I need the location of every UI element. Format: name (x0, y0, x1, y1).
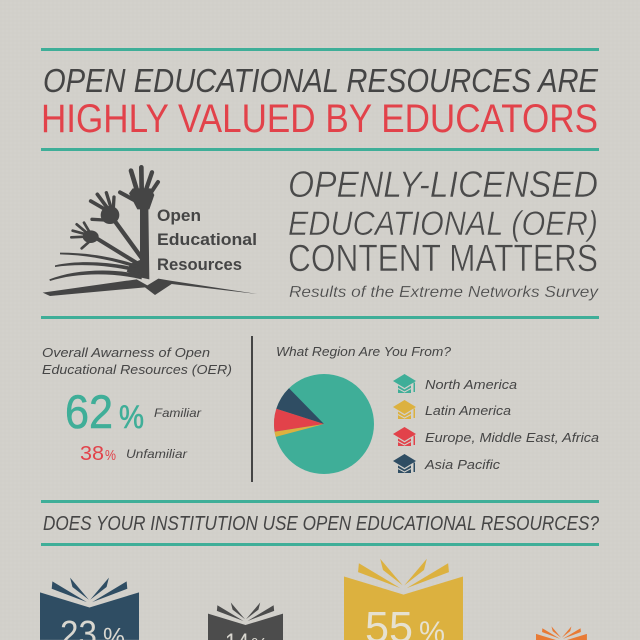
heading: openly-licensed content (288, 164, 599, 301)
logo wordmark: Resources (157, 255, 242, 274)
legend: Asia Pacific: Asia Pacific (424, 458, 501, 472)
icon: book with raised hands (43, 167, 257, 296)
heading: openly-licensed content: Results of the Extreme Networks Survey (289, 284, 599, 301)
book: 23% (40, 578, 139, 640)
awareness heading: Educational Resources (OER) (42, 362, 232, 377)
title (41, 62, 599, 141)
legend: Asia Pacific (393, 454, 501, 473)
stat: 62% familiar (65, 385, 202, 438)
stat: 38% unfamiliar (80, 443, 188, 465)
stat: 38% unfamiliar: 38 (80, 443, 104, 465)
logo wordmark: Educational (157, 230, 257, 249)
awareness heading (42, 345, 232, 377)
stat: 38% unfamiliar: % (105, 447, 116, 464)
heading: openly-licensed content: EDUCATIONAL (OER) (288, 205, 598, 243)
panel: awareness of OER (42, 345, 232, 465)
stat: 62% familiar: 62 (65, 385, 113, 438)
awareness heading: Overall Awarness of Open (42, 345, 210, 360)
legend: North America: North America (425, 378, 517, 392)
panel: region (274, 345, 599, 474)
book: 55% (344, 559, 463, 640)
pie chart (274, 374, 374, 474)
legend: Latin America: Latin America (425, 404, 511, 418)
stat: 38% unfamiliar: Unfamiliar (126, 447, 188, 461)
logo wordmark: Open (157, 206, 201, 225)
book: orange (536, 626, 587, 640)
stat: 62% familiar: Familiar (154, 406, 202, 420)
legend: Europe, Middle East, Africa: Europe, Middle East, Africa (425, 431, 599, 445)
logo: open educational resources (43, 167, 257, 296)
stat: 62% familiar: % (119, 399, 144, 435)
legend: Europe, Middle East, Africa (393, 427, 599, 446)
heading: openly-licensed content: OPENLY-LICENSED (288, 164, 598, 205)
region heading: What Region Are You From? (276, 345, 451, 359)
legend: North America (393, 374, 517, 393)
book: 14% (208, 603, 283, 640)
logo wordmark (157, 206, 257, 274)
legend: Latin America (393, 400, 511, 419)
